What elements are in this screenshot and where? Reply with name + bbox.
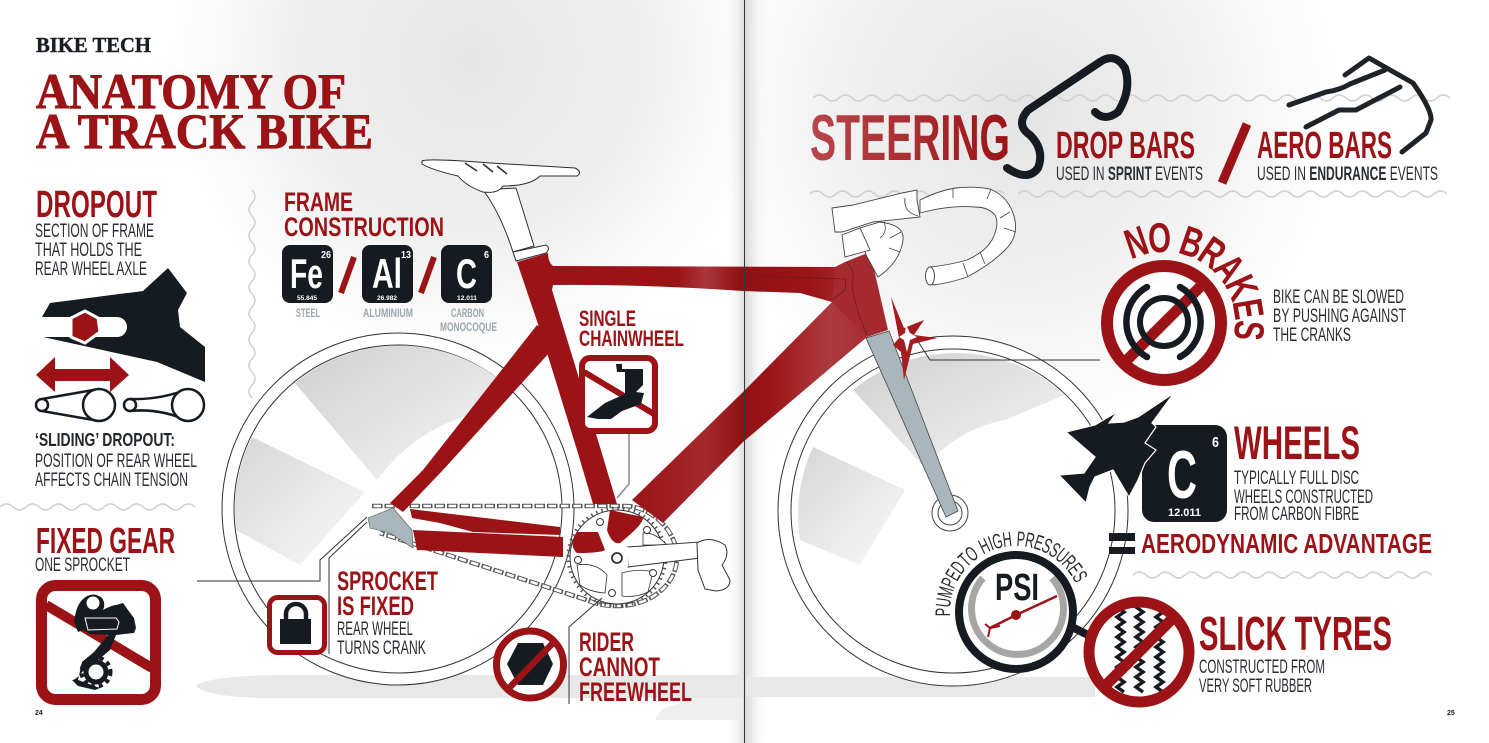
icon: axle hexagon [71, 311, 100, 343]
panel: sprocket is fixed: REAR WHEEL [337, 619, 413, 640]
curved label: U [1051, 543, 1074, 568]
curved label: H [975, 533, 994, 559]
star burst [891, 297, 937, 380]
icon: carbon element: C [456, 250, 477, 297]
panel: sprocket is fixed: IS FIXED [337, 591, 414, 621]
curved label: U [931, 596, 956, 609]
page fold line [744, 0, 745, 743]
icon: iron element: 55.845 [297, 296, 318, 302]
icon: carbon element [441, 245, 492, 303]
panel: rider cannot freewheel: CANNOT [579, 652, 660, 682]
panel: rider cannot freewheel: FREEWHEEL [579, 677, 692, 707]
title: A TRACK BIKE [36, 103, 373, 159]
curved label: S [1067, 567, 1093, 586]
curved label: T [953, 548, 976, 571]
curved label: P [1016, 527, 1026, 551]
curved heading: A [1204, 245, 1255, 291]
curved label: R [1023, 527, 1037, 553]
icon: iron element [282, 245, 333, 303]
equals sign [1109, 533, 1135, 554]
curved label: S [1038, 533, 1056, 558]
panel: fixed gear [35, 520, 175, 700]
panel: dropout: ‘SLIDING’ DROPOUT: [35, 430, 175, 450]
panel: steering: DROP BARS [1056, 125, 1195, 167]
panel: rider cannot freewheel: RIDER [579, 627, 634, 657]
saddle and seatpost [422, 160, 580, 261]
curved heading: R [1190, 227, 1235, 278]
icon: no rear derailleur [42, 586, 156, 700]
fork [866, 331, 958, 517]
icon: drop bars [1007, 58, 1127, 175]
slash [421, 257, 434, 293]
section heading: BIKE TECH [36, 33, 151, 57]
panel: single chainwheel: SINGLE [579, 306, 636, 331]
icon: dropout plate [42, 268, 205, 382]
panel: dropout [35, 184, 205, 491]
panel: steering: USED IN ENDURANCE EVENTS [1257, 164, 1438, 185]
curved label: E [940, 565, 965, 585]
curved label: M [932, 584, 959, 601]
panel: slick tyres: VERY SOFT RUBBER [1199, 676, 1312, 697]
icon: carbon element large: 6 [1212, 434, 1219, 451]
panel: dropout: AFFECTS CHAIN TENSION [35, 470, 188, 491]
panel: wheels: WHEELS CONSTRUCTED [1234, 487, 1373, 508]
curved heading: K [1216, 268, 1268, 307]
curved label: H [1001, 527, 1013, 552]
ground shadow [196, 675, 1095, 720]
panel: no brakes: BY PUSHING AGAINST [1273, 306, 1406, 327]
curved label: E [1063, 558, 1088, 579]
curved heading [1118, 213, 1274, 342]
curved label: G [990, 528, 1005, 554]
icon: padlock [270, 598, 324, 652]
panel: steering: STEERING [810, 101, 1010, 174]
panel: no brakes [1107, 213, 1406, 380]
panel: dropout: POSITION OF REAR WHEEL [35, 451, 197, 472]
curved label: I [985, 531, 997, 555]
icon: carbon element: 12.011 [457, 296, 478, 302]
panel: fixed gear: ONE SPROCKET [35, 555, 130, 576]
heading: WHEELS [1234, 416, 1360, 469]
panel: frame construction: CONSTRUCTION [284, 212, 444, 242]
icon: aluminium element: 13 [401, 250, 411, 261]
slash [341, 257, 354, 293]
curved heading: O [1147, 213, 1172, 262]
panel: frame construction [282, 187, 497, 334]
panel: frame construction: FRAME [284, 187, 353, 217]
panel: tyre pressure gauge: PSI [995, 567, 1039, 609]
drive chain [372, 506, 677, 606]
icon: carbon element large [1142, 425, 1227, 522]
rear dropout [368, 508, 413, 548]
curved heading: E [1223, 295, 1273, 322]
panel: single chainwheel [579, 306, 684, 431]
panel: frame construction: MONOCOQUE [440, 320, 497, 334]
icon: carbon element: 6 [484, 250, 489, 261]
icon: no brakes sign [1107, 266, 1221, 380]
panel: wheels: TYPICALLY FULL DISC [1234, 468, 1359, 489]
curved label: P [931, 608, 955, 616]
panel: single chainwheel: CHAINWHEEL [579, 326, 684, 351]
panel: wheels: FROM CARBON FIBRE [1234, 504, 1359, 525]
panel: wheels [1059, 393, 1432, 559]
panel: no brakes: BIKE CAN BE SLOWED [1273, 287, 1404, 308]
chainring and crank [568, 508, 730, 606]
page number right: 25 [1447, 710, 1455, 717]
panel: sprocket is fixed: TURNS CRANK [337, 638, 426, 659]
icon: no freewheel [496, 631, 564, 698]
curved heading: N [1118, 216, 1154, 268]
icon: carbon element large: C [1167, 437, 1197, 513]
curved label: R [1057, 550, 1081, 573]
panel: dropout: REAR WHEEL AXLE [35, 259, 147, 280]
icon: no front derailleur [582, 358, 655, 431]
title: ANATOMY OF [36, 63, 346, 119]
curved heading: B [1174, 216, 1210, 268]
bike frame [390, 252, 888, 557]
panel: steering: USED IN SPRINT EVENTS [1056, 164, 1203, 185]
panel: tyre pressure gauge [931, 527, 1093, 669]
front wheel [778, 336, 1128, 686]
panel: dropout: DROPOUT [36, 184, 157, 226]
curved heading: S [1225, 319, 1274, 342]
panel: rider cannot freewheel [496, 627, 692, 707]
panel: steering [810, 58, 1438, 185]
panel: sprocket is fixed: SPROCKET [337, 566, 438, 596]
icon: aluminium element: 26.982 [377, 296, 398, 302]
panel: no brakes: THE CRANKS [1273, 325, 1351, 346]
curved label: S [1045, 537, 1065, 562]
panel: steering: AERO BARS [1257, 125, 1392, 167]
icon: sliding arrow [36, 357, 129, 392]
icon: aluminium element: Al [372, 250, 402, 297]
leader lines [197, 340, 1100, 704]
icon: chain tension diagrams [36, 389, 204, 421]
icon: fighter jet [1059, 393, 1174, 503]
curved label: E [1031, 530, 1047, 555]
wavy dividers [0, 95, 1450, 578]
title [36, 63, 373, 159]
panel: dropout: SECTION OF FRAME [35, 221, 154, 242]
panel: frame construction: STEEL [296, 306, 320, 320]
panel: slick tyres: CONSTRUCTED FROM [1199, 657, 1325, 678]
page number left: 24 [35, 710, 43, 717]
icon: aluminium element [362, 245, 413, 303]
rear wheel [222, 333, 574, 685]
curved label: D [946, 556, 970, 578]
panel: frame construction: CARBON [451, 306, 484, 320]
icon: iron element: 26 [321, 250, 331, 261]
icon: no tyre tread [1089, 602, 1189, 702]
curved label: O [960, 541, 983, 566]
icon: aero bars [1289, 58, 1431, 152]
stem and handlebars [832, 187, 1016, 285]
slash [1222, 124, 1247, 183]
curved label [931, 527, 1093, 616]
curved label: P [936, 574, 962, 591]
panel: sprocket is fixed [270, 566, 438, 659]
icon: iron element: Fe [290, 250, 323, 297]
panel: slick tyres [1089, 602, 1392, 702]
icon: carbon element large: 12.011 [1168, 507, 1201, 519]
panel: fixed gear: FIXED GEAR [36, 520, 175, 561]
panel: frame construction: ALUMINIUM [363, 306, 413, 320]
panel: dropout: THAT HOLDS THE [35, 240, 142, 261]
